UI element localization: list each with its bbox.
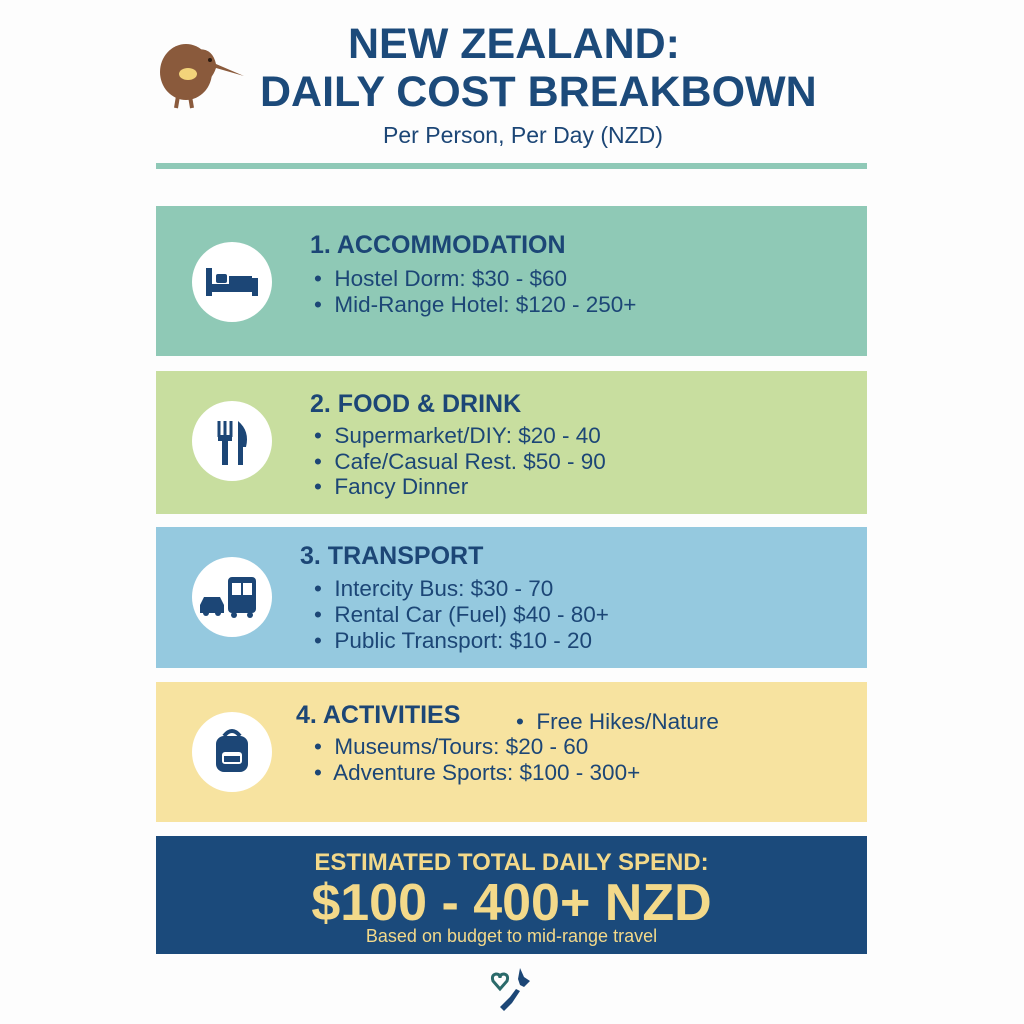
heading: 4. ACTIVITIES <box>296 701 460 729</box>
heading: 1. ACCOMMODATION <box>310 231 566 259</box>
icon: heart and NZ map <box>490 968 530 1011</box>
list: • Hostel Dorm: $30 - $60 <box>314 266 567 291</box>
panel: food <box>156 371 867 514</box>
panel: activities <box>156 682 867 822</box>
list: • Cafe/Casual Rest. $50 - 90 <box>314 448 606 474</box>
list: • Fancy Dinner <box>314 474 468 499</box>
total amount: $100 - 400+ NZD <box>311 874 712 932</box>
list: • Supermarket/DIY: $20 - 40 <box>314 423 601 448</box>
list: • Intercity Bus: $30 - 70 <box>314 576 553 601</box>
title: NEW ZEALAND: <box>348 20 680 68</box>
title: DAILY COST BREAKBOWN <box>260 68 817 116</box>
subtitle: Per Person, Per Day (NZD) <box>383 122 663 148</box>
heading: 3. TRANSPORT <box>300 542 483 570</box>
list <box>314 734 640 785</box>
icon: backpack <box>192 712 272 792</box>
list <box>314 423 606 499</box>
note: Based on budget to mid-range travel <box>366 926 657 946</box>
icon: car and bus <box>192 557 272 637</box>
list: • Public Transport: $10 - 20 <box>314 628 592 653</box>
panel: total <box>156 836 867 954</box>
list <box>314 576 609 653</box>
icon: bed <box>192 242 272 322</box>
icon: cutlery <box>192 401 272 481</box>
list: • Museums/Tours: $20 - 60 <box>314 734 588 759</box>
list: • Mid-Range Hotel: $120 - 250+ <box>314 292 636 317</box>
list: • Free Hikes/Nature <box>516 709 719 734</box>
total heading: ESTIMATED TOTAL DAILY SPEND: <box>314 849 709 876</box>
panel: transport <box>156 527 867 668</box>
icon: kiwi bird <box>160 44 244 108</box>
list <box>314 266 636 317</box>
list: • Rental Car (Fuel) $40 - 80+ <box>314 602 609 627</box>
heading: 2. FOOD & DRINK <box>310 390 521 418</box>
panel: accommodation <box>156 206 867 356</box>
title <box>260 20 817 116</box>
list: • Adventure Sports: $100 - 300+ <box>314 760 640 785</box>
